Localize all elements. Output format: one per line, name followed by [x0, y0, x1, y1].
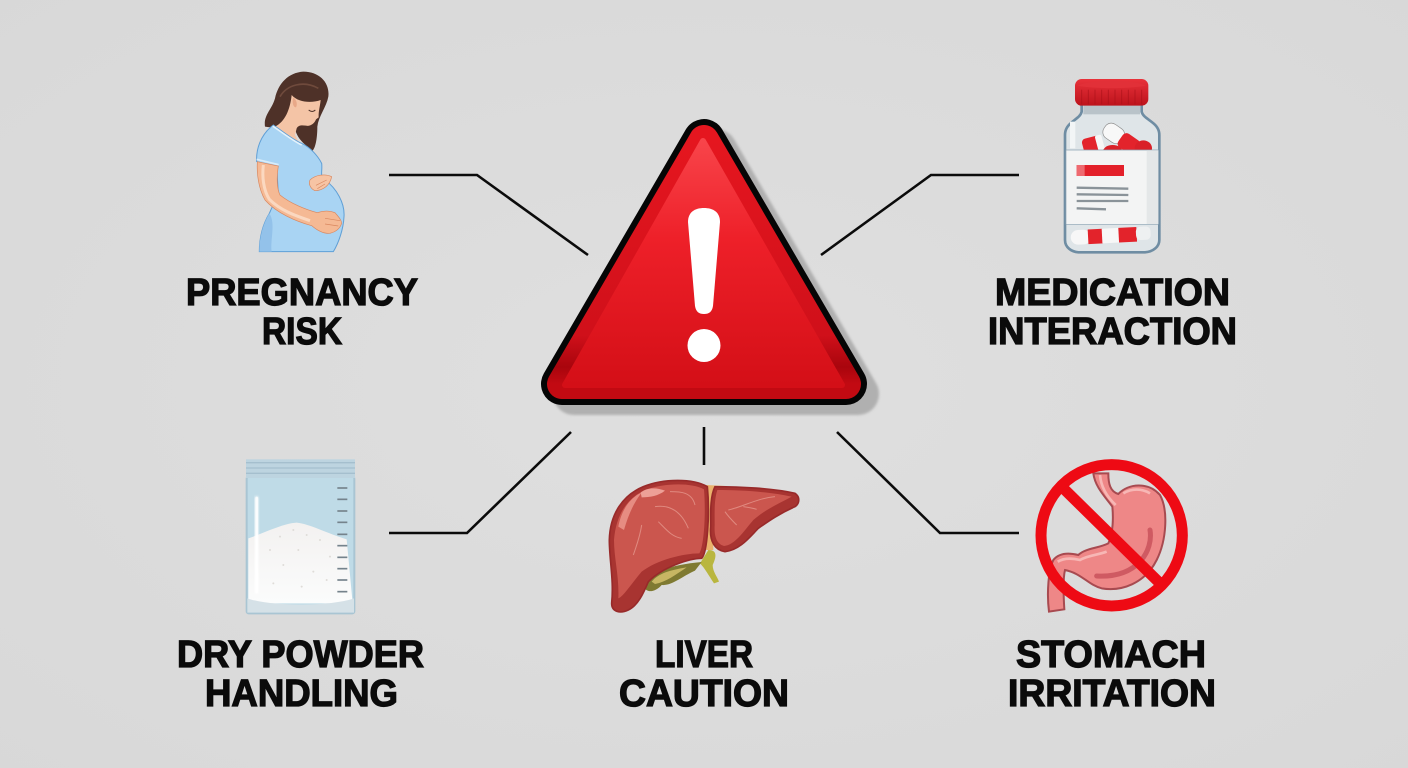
label: stomach irritation — [1008, 634, 1216, 715]
panel: pregnancy risk — [186, 72, 418, 353]
label: pregnancy risk — [186, 272, 418, 353]
exclamation mark — [688, 208, 720, 362]
panel: dry powder handling — [177, 459, 424, 715]
connector: pregnancy — [389, 175, 588, 255]
panel: stomach irritation — [1008, 465, 1216, 715]
connector: medication — [821, 175, 1019, 255]
label: pregnancy risk: RISK — [262, 311, 342, 353]
connector: stomach — [837, 432, 1019, 533]
label: liver caution: CAUTION — [619, 673, 789, 715]
label: pregnancy risk: PREGNANCY — [186, 272, 418, 314]
label: medication interaction: INTERACTION — [988, 311, 1237, 353]
label: dry powder handling: HANDLING — [205, 673, 398, 715]
label: dry powder handling: DRY POWDER — [177, 634, 424, 676]
panel: medication interaction — [988, 79, 1237, 353]
label: stomach irritation: IRRITATION — [1008, 673, 1216, 715]
icon: pregnant woman — [257, 72, 344, 252]
connector: dry powder — [389, 432, 571, 533]
icon: liver — [609, 480, 799, 612]
icon: powder bag — [246, 459, 355, 613]
central warning triangle — [562, 140, 858, 394]
panel: liver caution — [609, 480, 799, 715]
label: dry powder handling — [177, 634, 424, 715]
label: stomach irritation: STOMACH — [1016, 634, 1206, 676]
connector: liver — [703, 427, 705, 465]
label: liver caution: LIVER — [655, 634, 753, 676]
icon: pill bottle — [1065, 79, 1159, 252]
label: medication interaction — [988, 272, 1237, 353]
label: medication interaction: MEDICATION — [995, 272, 1230, 314]
label: liver caution — [619, 634, 789, 715]
icon: stomach with prohibition sign — [1041, 465, 1182, 612]
